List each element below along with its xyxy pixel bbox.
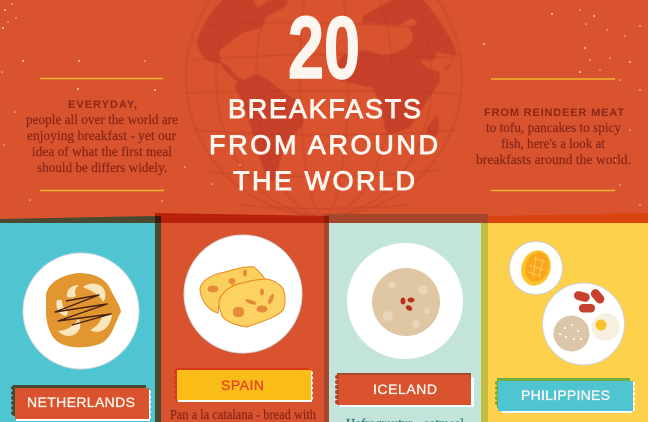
intro text left: idea of what the first meal xyxy=(32,145,172,160)
label: iceland: ICELAND xyxy=(373,381,437,397)
label: philippines: PHILIPPINES xyxy=(521,387,610,403)
intro text left xyxy=(26,78,178,190)
madagascar xyxy=(427,115,439,139)
intro text right xyxy=(476,79,631,190)
intro text left: EVERYDAY, xyxy=(68,99,137,111)
label: spain: SPAIN xyxy=(221,377,264,393)
intro text right: fish, here's a look at xyxy=(501,137,605,152)
icon: oatmeal with berries xyxy=(372,268,440,336)
intro text right: to tofu, pancakes to spicy xyxy=(486,121,621,136)
panel: philippines xyxy=(488,213,648,422)
title number 20: 20 xyxy=(288,0,360,97)
speckles left xyxy=(1,3,241,202)
intro text left: people all over the world are xyxy=(26,113,178,128)
intro text right: breakfasts around the world. xyxy=(476,153,631,168)
arabian sea xyxy=(420,52,457,72)
globe grid xyxy=(186,0,462,216)
plate xyxy=(23,253,139,369)
label: netherlands xyxy=(13,385,150,421)
intro text left: enjoying breakfast - yet our xyxy=(27,129,176,144)
title line 1: BREAKFASTS xyxy=(228,94,421,124)
icon: pancake with banana and chocolate xyxy=(46,273,121,347)
panel: spain xyxy=(155,213,329,422)
continents: europe, asia and africa xyxy=(335,0,457,133)
plate xyxy=(347,243,463,359)
title xyxy=(209,0,438,196)
panel: iceland xyxy=(324,214,488,422)
label: philippines xyxy=(497,378,633,413)
continents: americas xyxy=(197,0,303,182)
plate xyxy=(184,235,302,353)
panel: netherlands xyxy=(0,216,161,422)
intro text left: should be differs widely. xyxy=(37,161,167,176)
mediterranean sea xyxy=(350,19,416,55)
label: spain xyxy=(176,368,312,402)
speckles right xyxy=(483,9,641,206)
globe illustration xyxy=(186,0,462,216)
label: netherlands: NETHERLANDS xyxy=(27,394,135,410)
label: iceland xyxy=(337,373,474,407)
intro text right: FROM REINDEER MEAT xyxy=(484,107,624,119)
title line 3: THE WORLD xyxy=(233,166,415,196)
icon: bread slices xyxy=(200,267,285,327)
large plate with sausages, rice and egg xyxy=(542,283,624,365)
title line 2: FROM AROUND xyxy=(209,130,438,160)
small plate with mango xyxy=(510,242,562,294)
